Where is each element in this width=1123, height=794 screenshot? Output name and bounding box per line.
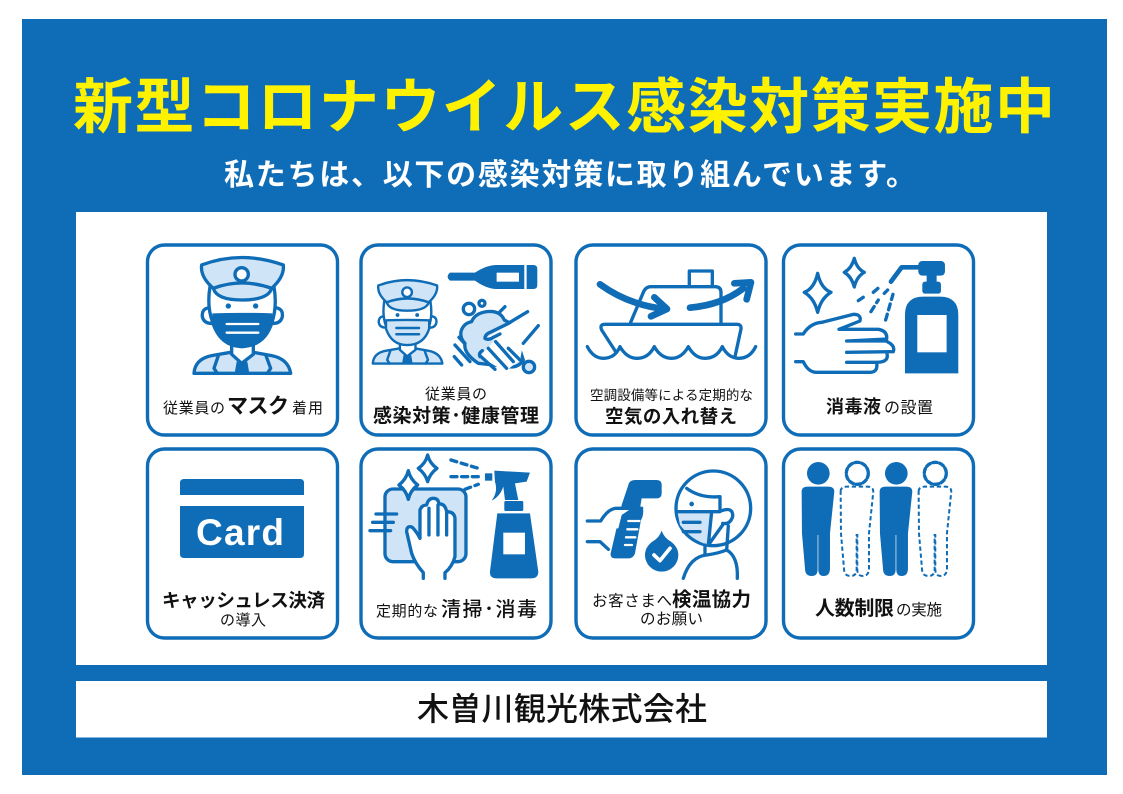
company name: 木曽川観光株式会社	[417, 691, 707, 727]
icon: thermometer gun and masked customer	[587, 471, 751, 578]
label: cashless: の導入	[220, 612, 266, 629]
label: people limit: の実施	[896, 601, 942, 619]
icon: boat with air flow arrows	[587, 271, 756, 358]
title: 新型コロナウイルス感染対策実施中	[73, 74, 1055, 141]
panel: cashless	[148, 449, 338, 638]
icon: small conductor, thermometer and hand washing	[373, 265, 538, 373]
icon: wiping hand and spray bottle	[370, 455, 538, 578]
panel: cleaning	[361, 449, 551, 638]
subtitle: 私たちは、以下の感染対策に取り組んでいます。	[224, 159, 916, 192]
label: air exchange	[590, 387, 753, 427]
label: sanitiser: の設置	[884, 399, 933, 417]
white main panel	[76, 212, 1047, 665]
label: people limit: 人数制限	[815, 597, 894, 620]
panel: staff mask	[148, 245, 338, 435]
label: staff health: 感染対策･健康管理	[373, 404, 539, 427]
panel: temperature check	[576, 449, 766, 638]
label: temperature check: 検温協力	[672, 589, 751, 611]
panel: sanitiser	[784, 245, 974, 435]
label: sanitiser	[826, 397, 933, 417]
icon: sanitiser bottle and hand	[796, 258, 958, 373]
label: staff mask	[163, 395, 323, 418]
icon: conductor with mask	[194, 257, 291, 373]
panel: staff health	[361, 245, 551, 435]
icon: solid and dashed people	[802, 462, 951, 576]
label: staff health	[373, 386, 539, 427]
label: air exchange: 空調設備等による定期的な	[590, 387, 753, 403]
icon: card: Card	[196, 512, 284, 553]
label: air exchange: 空気の入れ替え	[605, 406, 737, 427]
label: sanitiser: 消毒液	[826, 397, 881, 417]
label: cashless	[162, 590, 325, 629]
label: temperature check: お客さまへ	[592, 592, 672, 610]
label: staff health: 従業員の	[425, 386, 487, 403]
label: people limit	[815, 597, 942, 620]
footer band	[76, 681, 1047, 738]
label: staff mask: マスク	[227, 395, 289, 418]
label: cashless: キャッシュレス決済	[162, 590, 325, 611]
label: temperature check: のお願い	[640, 610, 703, 628]
label: cleaning: 定期的な	[376, 603, 438, 620]
label: staff mask: 着用	[292, 400, 323, 417]
panel: people limit	[784, 449, 974, 638]
panel: air exchange	[576, 245, 766, 435]
label: cleaning	[376, 598, 537, 621]
label: staff mask: 従業員の	[163, 400, 225, 417]
icon: card	[180, 479, 304, 558]
label: cleaning: 清掃･消毒	[441, 598, 537, 621]
label: temperature check	[592, 589, 751, 628]
